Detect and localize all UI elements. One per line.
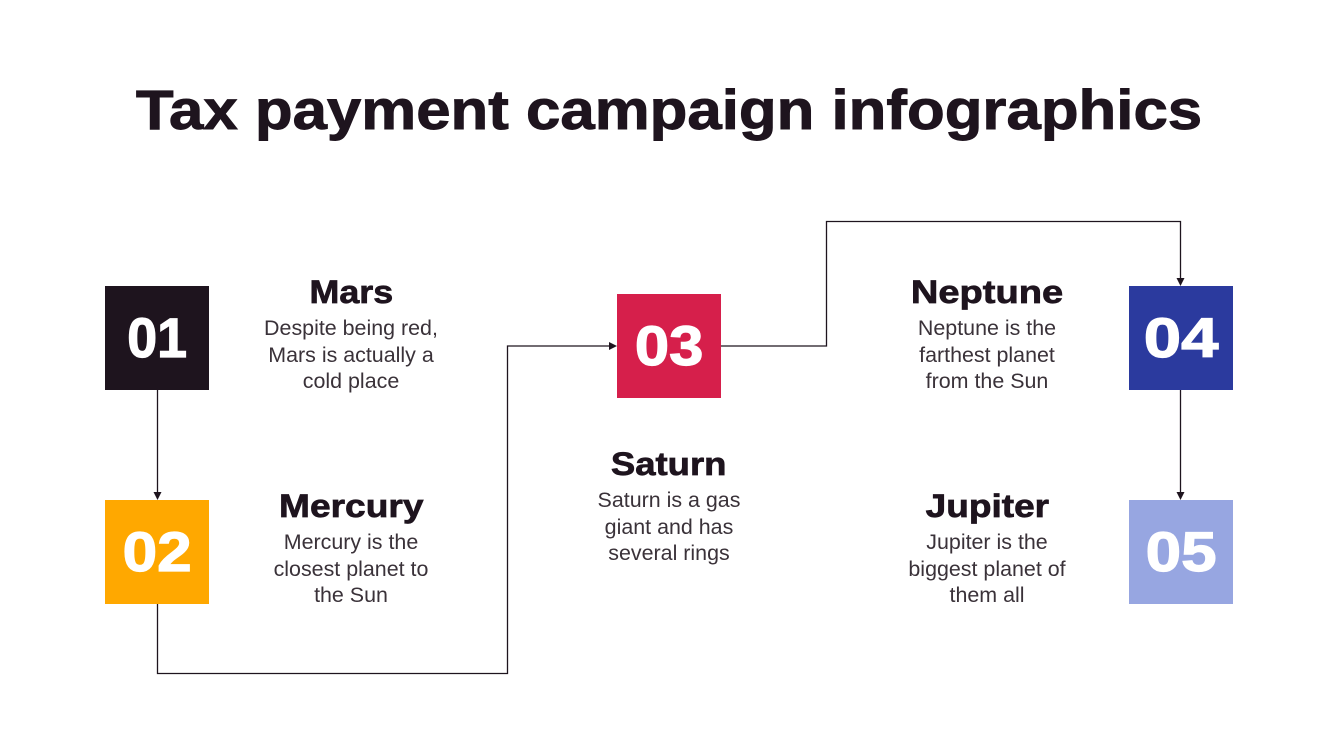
text: Mars: Despite being red, xyxy=(264,317,438,340)
text: Saturn: several rings xyxy=(608,542,730,565)
text: Mercury: Mercury is the xyxy=(284,531,418,554)
text: Mars: cold place xyxy=(303,370,399,393)
text: Saturn: giant and has xyxy=(605,516,733,538)
arrow: 04 to 05 xyxy=(1176,390,1184,500)
arrow: 02 to 03 xyxy=(158,342,617,674)
arrow: 03 to 04 xyxy=(721,222,1184,346)
box 04 xyxy=(1129,286,1233,390)
text: Mercury: the Sun xyxy=(314,584,388,607)
arrow: 01 to 02 xyxy=(154,390,162,500)
text: Jupiter: biggest planet of xyxy=(908,558,1066,580)
text: Neptune xyxy=(911,274,1063,393)
text: Mercury: closest planet to xyxy=(274,558,428,580)
text: Neptune: from the Sun xyxy=(926,370,1048,393)
text: Jupiter: them all xyxy=(949,584,1025,607)
text: Saturn xyxy=(598,446,740,565)
box 02: 02 xyxy=(122,520,192,583)
text: Neptune: farthest planet xyxy=(919,344,1055,366)
box 05: 05 xyxy=(1145,520,1217,583)
text: Mars xyxy=(264,274,438,393)
text: Neptune: Neptune xyxy=(911,274,1063,310)
box 05 xyxy=(1129,500,1233,604)
box 01: 01 xyxy=(127,306,187,369)
box 01 xyxy=(105,286,209,390)
box 03: 03 xyxy=(635,314,703,377)
text: Neptune: Neptune is the xyxy=(918,317,1056,340)
text: Mars: Mars xyxy=(309,274,393,310)
text: Jupiter xyxy=(908,488,1066,607)
text: Jupiter: Jupiter xyxy=(925,488,1049,524)
title: Tax payment campaign infographics xyxy=(136,78,1202,141)
box 03 xyxy=(617,294,721,398)
box 04: 04 xyxy=(1144,306,1218,369)
text: Saturn: Saturn is a gas xyxy=(598,489,740,512)
text: Saturn: Saturn xyxy=(611,446,727,482)
text: Mercury xyxy=(274,488,428,607)
text: Jupiter: Jupiter is the xyxy=(926,531,1048,554)
text: Mercury: Mercury xyxy=(279,488,423,524)
text: Mars: Mars is actually a xyxy=(268,344,434,366)
box 02 xyxy=(105,500,209,604)
